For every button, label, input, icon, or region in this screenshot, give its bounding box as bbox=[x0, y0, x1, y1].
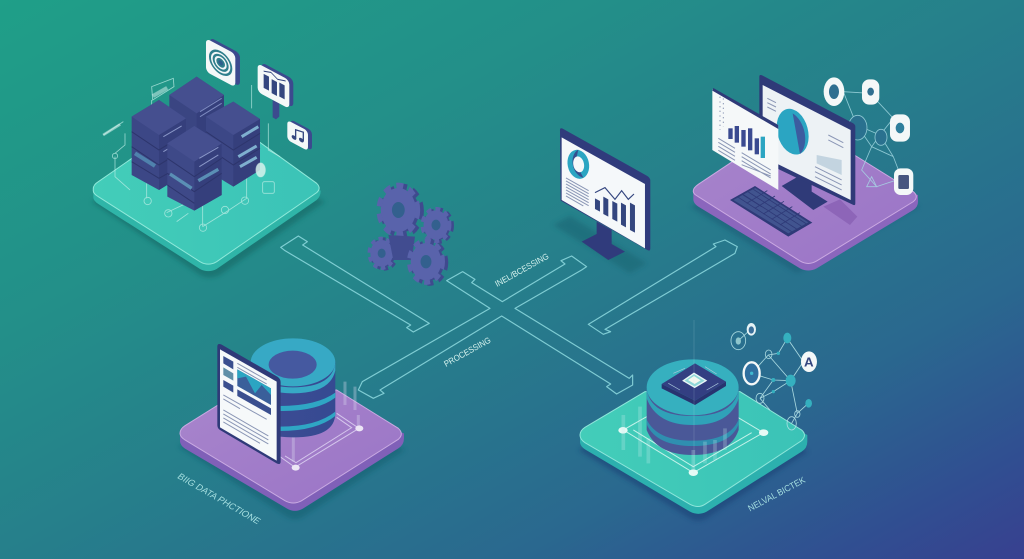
label: processing: PROCESSING bbox=[442, 335, 492, 369]
panel: neural network platform bbox=[578, 320, 817, 521]
icon: network node grid bbox=[894, 168, 913, 195]
monitor shadow bbox=[823, 199, 857, 225]
icon: network node mail bbox=[890, 114, 910, 142]
donut chart bbox=[565, 148, 592, 181]
panel: processing gears bbox=[369, 186, 452, 283]
panel: big data storage platform bbox=[175, 338, 405, 526]
right server stack bbox=[206, 102, 260, 187]
letter A node: A bbox=[804, 355, 814, 370]
arrow: top-left to centre bbox=[281, 236, 429, 332]
keyboard bbox=[730, 186, 812, 237]
icon: music note bbox=[287, 119, 312, 151]
tablet document bbox=[217, 344, 281, 464]
gear: bottom left bbox=[369, 239, 397, 269]
purple platform bbox=[690, 122, 920, 273]
monitor stand bbox=[582, 222, 625, 260]
back monitor with pie chart bbox=[759, 75, 855, 210]
teal platform bbox=[93, 108, 321, 271]
circuit lines bbox=[103, 78, 280, 231]
back server stack bbox=[169, 77, 224, 150]
icon: target bbox=[206, 37, 240, 87]
gear: right bbox=[422, 209, 452, 242]
panel: data sources server platform bbox=[92, 37, 325, 277]
monitor frame bbox=[560, 128, 650, 251]
gear: bottom centre bbox=[409, 241, 446, 283]
platform shadow bbox=[92, 153, 325, 277]
icon: network node people bbox=[824, 77, 844, 106]
teal platform bbox=[578, 377, 808, 521]
arrows: flow outlines bbox=[281, 236, 737, 398]
node ring bbox=[744, 362, 760, 384]
arrow: central cross bbox=[358, 256, 633, 398]
gear: connector bbox=[388, 235, 415, 260]
left server stack bbox=[132, 100, 186, 190]
front server stack bbox=[167, 126, 222, 211]
arrow: right to top-right bbox=[588, 240, 737, 334]
monitor screen bbox=[562, 137, 645, 248]
icon: network node screen bbox=[862, 79, 879, 105]
circuit frame with nodes bbox=[280, 382, 363, 471]
label: big data: BIIG DATA PHCTIONE bbox=[175, 472, 263, 526]
network lines and icons bbox=[824, 77, 913, 195]
label: neural network: NELVAL BICTEK bbox=[746, 475, 807, 513]
text block lines bbox=[566, 178, 589, 206]
padlock and document glyphs bbox=[102, 86, 266, 177]
purple platform bbox=[178, 390, 405, 519]
neural network graph bbox=[731, 323, 817, 430]
database cylinder bbox=[251, 338, 335, 437]
panel: dashboard desktop platform bbox=[690, 75, 920, 273]
monitor shadow bbox=[553, 216, 647, 273]
icon: bar chart sign bbox=[258, 62, 293, 119]
bar chart and trend line bbox=[595, 188, 635, 233]
panel: analytics monitor bbox=[553, 128, 650, 273]
network nodes bbox=[771, 333, 812, 408]
neural cylinder with chip bbox=[623, 320, 739, 473]
front window with bar chart bbox=[712, 88, 778, 190]
gear: large bbox=[379, 186, 422, 235]
server rack stacks bbox=[132, 77, 260, 211]
label: top processing: INEL/BCESSING bbox=[493, 251, 550, 289]
circuit frame with nodes bbox=[618, 417, 768, 476]
